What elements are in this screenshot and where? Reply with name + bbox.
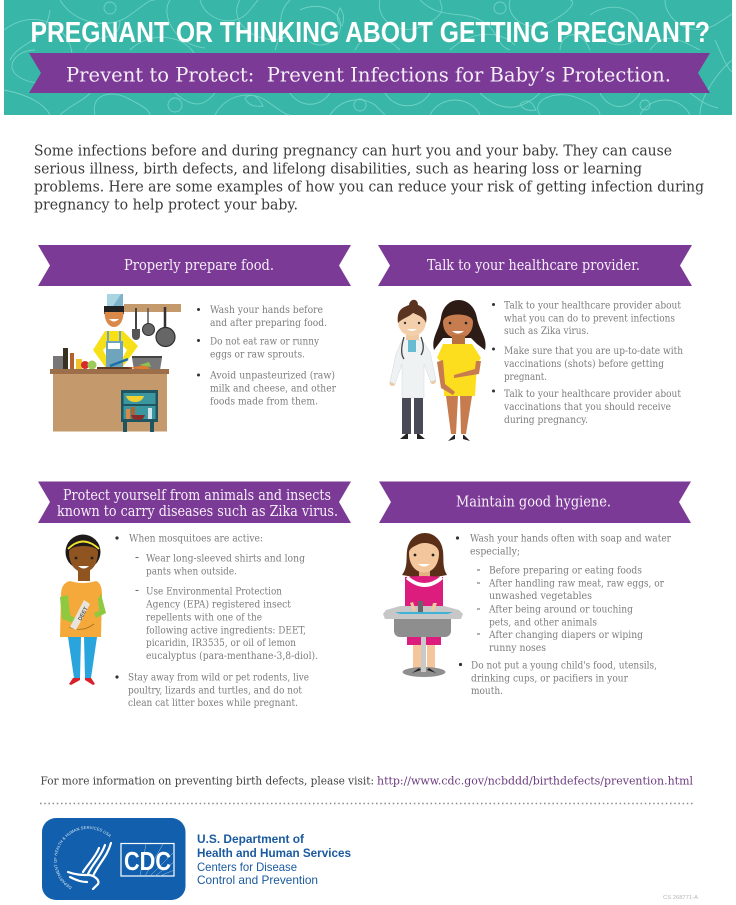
subtitle ribbon: Prevent to Protect: Prevent Infections for Baby’s Protection. <box>66 64 671 86</box>
illustration: child with DEET repellent <box>60 534 106 685</box>
agency name text <box>197 832 351 887</box>
animals bullet list: Wear long-sleeved shirts and long <box>146 552 305 564</box>
intro paragraph: Some infections before and during pregnancy can hurt you and your baby. They can cause <box>34 144 672 160</box>
provider bullet list: such as Zika virus. <box>504 325 589 337</box>
hygiene bullet list: mouth. <box>471 685 503 697</box>
animals bullet list: Use Environmental Protection <box>146 586 282 598</box>
ribbon heading: provider <box>378 245 692 286</box>
ribbon heading: animals and insects <box>38 482 351 523</box>
ribbon heading: animals and insects: known to carry diseases such as Zika virus. <box>57 504 338 520</box>
food bullet list: Avoid unpasteurized (raw) <box>209 370 335 382</box>
ribbon heading: food: Properly prepare food. <box>124 258 274 274</box>
hygiene bullet list: pets, and other animals <box>489 616 597 628</box>
more information line: For more information on preventing birth defects, please visit: <box>40 774 374 788</box>
panel: talk to your healthcare provider <box>378 245 692 441</box>
illustration: chef in kitchen <box>50 294 181 432</box>
hygiene bullet list: Before preparing or eating foods <box>489 564 642 576</box>
provider bullet list: pregnant. <box>504 371 547 383</box>
hygiene bullet list: unwashed vegetables <box>489 590 592 602</box>
animals bullet list <box>115 532 318 709</box>
subtitle ribbon <box>29 53 710 93</box>
illustration: child with DEET repellent: DEET <box>77 606 90 622</box>
intro paragraph: serious illness, birth defects, and lifelong disabilities, such as hearing loss or learning <box>34 162 642 178</box>
illustration: woman washing hands at sink <box>383 533 463 677</box>
hygiene bullet list: After handling raw meat, raw eggs, or <box>488 578 665 590</box>
hygiene bullet list: After being around or touching <box>488 604 633 616</box>
animals bullet list: Stay away from wild or pet rodents, live <box>128 672 309 684</box>
ribbon heading: provider: Talk to your healthcare provider. <box>427 258 640 274</box>
provider bullet list <box>492 300 683 426</box>
animals bullet list: following active ingredients: DEET, <box>146 624 306 636</box>
food bullet list: and after preparing food. <box>210 317 327 329</box>
hygiene bullet list <box>456 532 672 697</box>
intro paragraph <box>34 144 704 214</box>
panel: maintain good hygiene <box>379 482 691 697</box>
animals bullet list: Agency (EPA) registered insect <box>145 598 292 610</box>
icon: CDC box: CDC <box>124 846 171 876</box>
animals bullet list: clean cat litter boxes while pregnant. <box>128 697 298 709</box>
panel: properly prepare food <box>38 245 351 432</box>
HHS and CDC logo <box>42 818 186 900</box>
publication code: CS 268771-A <box>663 895 699 901</box>
food bullet list: foods made from them. <box>210 396 318 408</box>
icon: HHS eagle seal: DEPARTMENT OF HEALTH & HUMAN SERVICES USA <box>54 826 111 890</box>
illustration: doctor and pregnant woman <box>390 300 486 441</box>
header banner <box>4 0 732 115</box>
hygiene bullet list: Wash your hands often with soap and water <box>470 532 672 544</box>
hygiene bullet list: Do not put a young child's food, utensils, <box>471 660 657 672</box>
animals bullet list: picaridin, IR3535, or oil of lemon <box>146 637 296 649</box>
ribbon heading: hygiene <box>379 482 691 523</box>
agency name text: Control and Prevention <box>197 873 318 887</box>
food bullet list: milk and cheese, and other <box>210 382 337 394</box>
hygiene bullet list: After changing diapers or wiping <box>488 629 643 641</box>
agency name text: Centers for Disease <box>197 860 297 874</box>
food bullet list: Wash your hands before <box>210 304 323 316</box>
animals bullet list: When mosquitoes are active: <box>129 532 263 544</box>
provider bullet list: Talk to your healthcare provider about <box>504 300 682 312</box>
hygiene bullet list: drinking cups, or pacifiers in your <box>471 672 629 684</box>
animals bullet list: poultry, lizards and turtles, and do not <box>128 684 303 696</box>
animals bullet list: eucalyptus (para-menthane-3,8-diol). <box>146 650 318 662</box>
provider bullet list: what you can do to prevent infections <box>504 312 675 324</box>
intro paragraph: pregnancy to help protect your baby. <box>34 198 298 214</box>
hygiene bullet list: runny noses <box>489 642 546 654</box>
animals bullet list: repellents with one of the <box>146 612 262 624</box>
ribbon heading: food <box>38 245 351 286</box>
hygiene bullet list: especially; <box>470 546 520 558</box>
ribbon heading: hygiene: Maintain good hygiene. <box>456 494 611 510</box>
more information line: http://www.cdc.gov/ncbddd/birthdefects/prevention.html <box>377 774 693 788</box>
food bullet list <box>197 304 337 408</box>
provider bullet list: Make sure that you are up-to-date with <box>504 345 683 357</box>
provider bullet list: during pregnancy. <box>504 414 588 426</box>
animals bullet list: pants when outside. <box>146 566 237 578</box>
provider bullet list: vaccinations that you should receive <box>503 401 671 413</box>
panel: protect from animals and insects <box>38 482 351 709</box>
provider bullet list: vaccinations (shots) before getting <box>503 358 664 370</box>
food bullet list: eggs or raw sprouts. <box>210 348 305 360</box>
ribbon heading: animals and insects: Protect yourself from animals and insects <box>63 488 331 504</box>
food bullet list: Do not eat raw or runny <box>210 336 319 348</box>
more information line <box>40 774 693 788</box>
agency name text: Health and Human Services <box>197 846 351 860</box>
provider bullet list: Talk to your healthcare provider about <box>504 388 682 400</box>
intro paragraph: problems. Here are some examples of how you can reduce your risk of getting infection during <box>34 180 704 196</box>
agency name text: U.S. Department of <box>197 832 305 846</box>
